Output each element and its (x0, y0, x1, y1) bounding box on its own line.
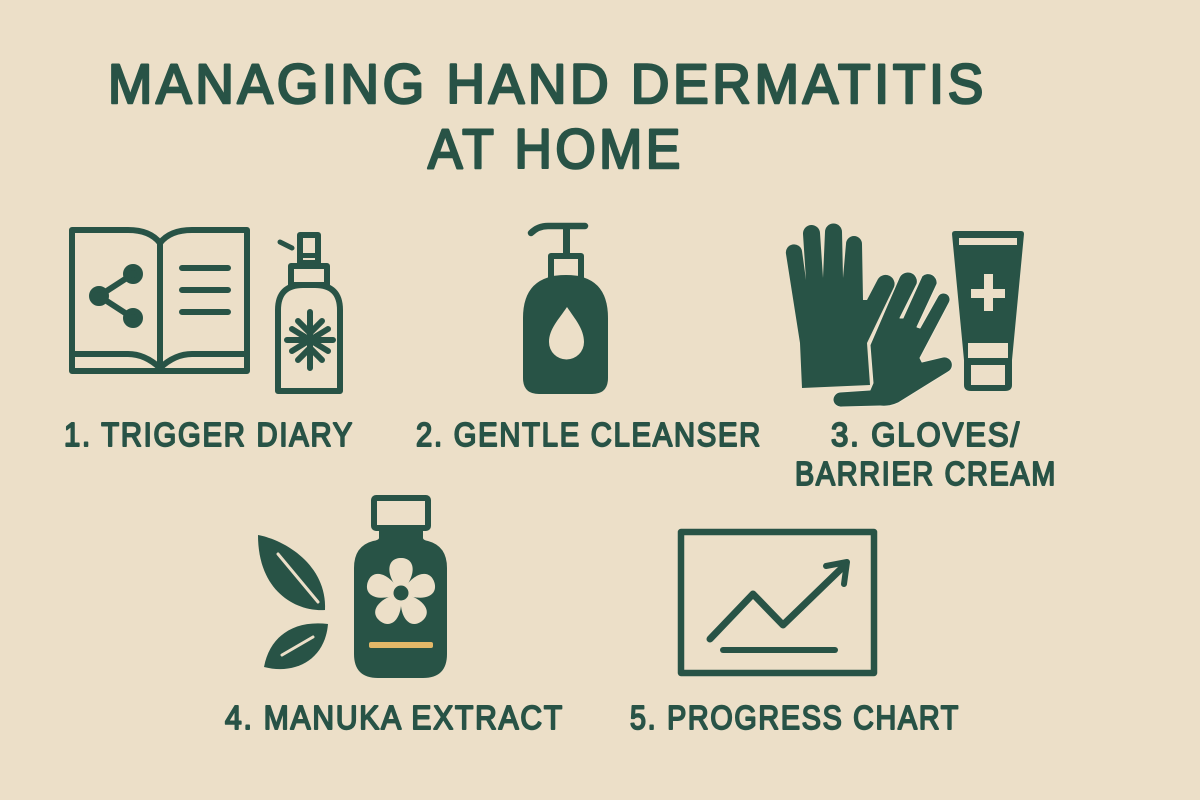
icon: pump bottle with droplet (523, 226, 608, 394)
panel: gentle cleanser (416, 226, 762, 453)
label: gloves and barrier cream (795, 416, 1057, 492)
label: manuka extract: 4. MANUKA EXTRACT (225, 699, 564, 736)
icon: pair of gloves (786, 224, 952, 407)
panel: trigger diary (64, 230, 354, 453)
label: progress chart: 5. PROGRESS CHART (630, 699, 960, 736)
panel: progress chart (630, 532, 960, 736)
label: gloves and barrier cream: 3. GLOVES/ (831, 416, 1021, 453)
icon: extract bottle with flower (354, 498, 447, 678)
title (108, 52, 987, 180)
icon: barrier cream tube with cross (952, 231, 1024, 391)
label: trigger diary: 1. TRIGGER DIARY (64, 416, 354, 453)
title: MANAGING HAND DERMATITIS (108, 52, 987, 115)
icon: spray bottle with snowflake (278, 235, 340, 391)
title: AT HOME (428, 117, 684, 180)
icon: framed rising line chart (681, 532, 874, 673)
icon: manuka leaves (258, 535, 328, 669)
label: gentle cleanser: 2. GENTLE CLEANSER (416, 416, 762, 453)
icon: open book with share symbol (72, 230, 247, 371)
panel: gloves and barrier cream (786, 224, 1057, 492)
panel: manuka extract (225, 498, 564, 736)
label: gloves and barrier cream: BARRIER CREAM (795, 455, 1057, 492)
